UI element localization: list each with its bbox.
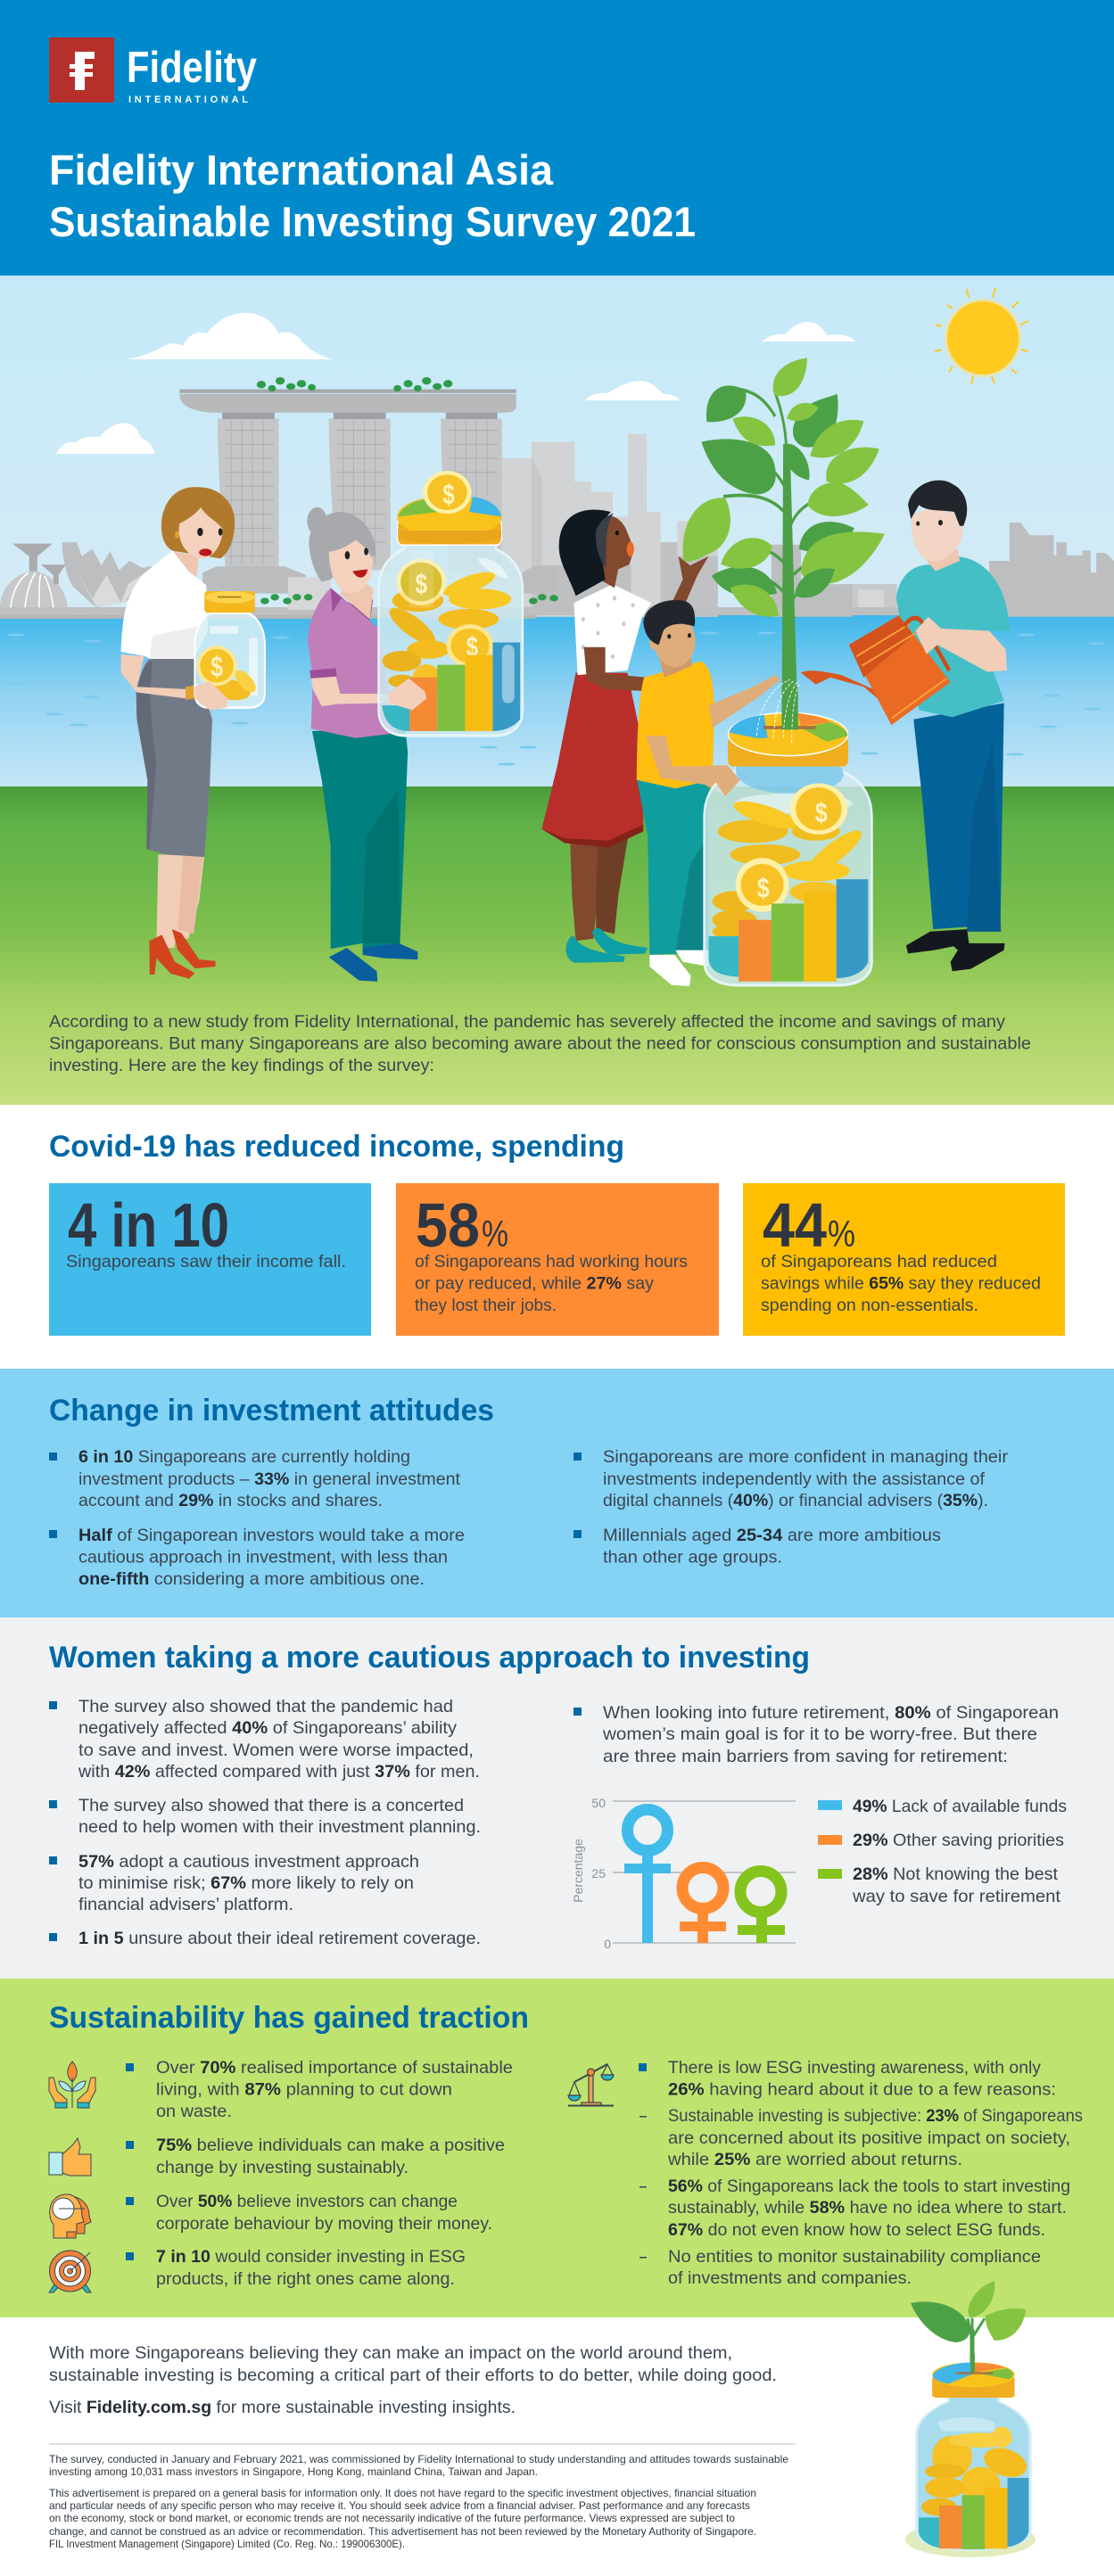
disclaimer: investing among 10,031 mass investors in Singapore, Hong Kong, mainland China, Taiwan and Japan. bbox=[49, 2465, 538, 2478]
left bullets: need to help women with their investment planning. bbox=[78, 1817, 481, 1837]
symbol: 49% blue bbox=[624, 1810, 671, 1943]
mother bbox=[541, 510, 709, 963]
chart legend: 28% Not knowing the best bbox=[853, 1864, 1059, 1884]
right bullets: than other age groups. bbox=[603, 1548, 782, 1568]
chart legend: 49% Lack of available funds bbox=[853, 1797, 1067, 1816]
Marina Bay Sands bbox=[179, 377, 558, 610]
older woman with large jar bbox=[307, 507, 426, 982]
right bullets bbox=[639, 2058, 1083, 2288]
stat card: 58%: or pay reduced, while 27% say bbox=[415, 1273, 654, 1293]
left bullets: to save and invest. Women were worse impacted, bbox=[78, 1741, 474, 1760]
stat card: 58%: % bbox=[482, 1213, 508, 1255]
chart legend: way to save for retirement bbox=[852, 1887, 1061, 1906]
title bbox=[49, 146, 696, 245]
logo: Fidelity International: Fidelity bbox=[127, 44, 257, 92]
stat card: 44% bbox=[743, 1183, 1065, 1336]
section: closing bbox=[49, 2281, 1036, 2557]
left bullets: Half of Singaporean investors would take a more bbox=[78, 1526, 465, 1545]
right bullets: digital channels (40%) or financial advisers (35%). bbox=[603, 1491, 988, 1510]
hero illustration panel bbox=[0, 276, 1114, 1105]
right bullets: of investments and companies. bbox=[668, 2268, 912, 2288]
right bullets: Singaporeans are more confident in managing their bbox=[603, 1447, 1009, 1467]
large coin jar: $ bbox=[416, 568, 427, 599]
stat card: 44%: of Singaporeans had reduced bbox=[761, 1252, 997, 1272]
chart: barriers, female symbols bbox=[571, 1796, 796, 1951]
left bullets: corporate behaviour by moving their money. bbox=[156, 2214, 492, 2234]
right bullets: 56% of Singaporeans lack the tools to start investing bbox=[668, 2177, 1070, 2196]
heading: Covid-19 has reduced income, spending bbox=[49, 1130, 624, 1164]
stat card: 58%: they lost their jobs. bbox=[415, 1296, 557, 1315]
boy bbox=[637, 600, 780, 986]
disclaimer: The survey, conducted in January and February 2021, was commissioned by Fidelity International to study understanding and attitudes towards sustainable bbox=[49, 2453, 788, 2465]
chart: barriers, female symbols: 25 bbox=[591, 1866, 606, 1881]
city skyline bbox=[0, 434, 1114, 619]
left bullets bbox=[126, 2058, 513, 2289]
title: Sustainable Investing Survey 2021 bbox=[49, 198, 696, 245]
intro text: investing. Here are the key findings of the survey: bbox=[49, 1056, 434, 1075]
chart: barriers, female symbols: 50 bbox=[591, 1796, 606, 1810]
left bullets: 6 in 10 Singaporeans are currently holding bbox=[78, 1447, 410, 1467]
left bullets: on waste. bbox=[156, 2102, 232, 2121]
right bullets: while 25% are worried about returns. bbox=[667, 2150, 962, 2169]
left bullets: change by investing sustainably. bbox=[156, 2158, 408, 2177]
left bullets: investment products – 33% in general investment bbox=[78, 1469, 461, 1489]
right bullets: investments independently with the assistance of bbox=[603, 1469, 986, 1489]
stat card: 4 in 10 bbox=[49, 1183, 371, 1336]
title: Fidelity International Asia bbox=[49, 146, 554, 193]
water ripples bbox=[5, 631, 1106, 765]
right bullet: When looking into future retirement, 80% of Singaporean bbox=[603, 1703, 1059, 1723]
coin jar with tree: $ bbox=[815, 796, 828, 828]
chart legend: 29% Other saving priorities bbox=[853, 1831, 1064, 1850]
header band bbox=[0, 0, 1114, 276]
heading: Women taking a more cautious approach to investing bbox=[49, 1641, 810, 1675]
icon: target with arrow bbox=[49, 2251, 91, 2292]
closing text: Visit Fidelity.com.sg for more sustainable investing insights. bbox=[49, 2398, 516, 2417]
small coin jar: $ bbox=[210, 652, 223, 684]
left bullets: financial advisers’ platform. bbox=[78, 1895, 293, 1914]
stat card: 44%: % bbox=[828, 1213, 855, 1255]
right bullets: Millennials aged 25-34 are more ambitious bbox=[603, 1526, 941, 1545]
stat card: 44%: 44 bbox=[763, 1190, 827, 1260]
left bullets: 75% believe individuals can make a positive bbox=[156, 2136, 505, 2155]
disclaimer: FIL Investment Management (Singapore) Limited (Co. Reg. No.: 199006300E). bbox=[49, 2538, 405, 2550]
chart: barriers, female symbols: 0 bbox=[604, 1937, 611, 1951]
sapling tree bbox=[683, 358, 885, 728]
stat card: 4 in 10: 4 in 10 bbox=[68, 1190, 229, 1260]
stat card: 44%: savings while 65% say they reduced bbox=[761, 1273, 1041, 1293]
heading: Sustainability has gained traction bbox=[49, 2001, 529, 2035]
left bullets: 57% adopt a cautious investment approach bbox=[78, 1852, 419, 1872]
left bullets: Over 70% realised importance of sustainable bbox=[156, 2058, 513, 2078]
sun bbox=[935, 288, 1028, 384]
left bullets: living, with 87% planning to cut down bbox=[156, 2079, 452, 2099]
section: Women bbox=[0, 1617, 1114, 1979]
section: Covid-19 bbox=[0, 1105, 1114, 1369]
left bullets: cautious approach in investment, with less than bbox=[78, 1548, 448, 1568]
right bullets: 67% do not even know how to select ESG funds. bbox=[668, 2220, 1045, 2240]
symbol: 28% green bbox=[738, 1871, 785, 1943]
right bullets: No entities to monitor sustainability compliance bbox=[668, 2247, 1041, 2267]
large coin jar: $ bbox=[442, 479, 455, 510]
large coin jar bbox=[379, 471, 523, 736]
right bullet: women’s main goal is for it to be worry-free. But there bbox=[602, 1724, 1037, 1744]
section: Sustainability bbox=[0, 1979, 1114, 2317]
icon: hands with plant bbox=[49, 2062, 95, 2108]
disclaimer bbox=[49, 2453, 788, 2550]
right bullets: 26% having heard about it due to a few reasons: bbox=[668, 2079, 1056, 2099]
left bullets bbox=[49, 1447, 465, 1589]
chart legend bbox=[818, 1797, 1067, 1906]
icon: thumbs up bbox=[49, 2138, 91, 2176]
stat card: 44%: spending on non-essentials. bbox=[761, 1296, 978, 1315]
stat card: 58%: of Singaporeans had working hours bbox=[415, 1252, 688, 1272]
right bullets: Sustainable investing is subjective: 23% of Singaporeans bbox=[668, 2106, 1083, 2126]
stat card: 4 in 10: Singaporeans saw their income fall. bbox=[66, 1252, 346, 1272]
clouds bbox=[56, 313, 855, 454]
chart: barriers, female symbols: Percentage bbox=[571, 1839, 585, 1903]
intro text bbox=[49, 1012, 1031, 1075]
left bullets: products, if the right ones came along. bbox=[156, 2269, 455, 2289]
section: Change in investment attitudes bbox=[0, 1369, 1114, 1617]
right bullets bbox=[574, 1447, 1009, 1568]
left bullets: with 42% affected compared with just 37% for men. bbox=[78, 1762, 480, 1782]
stat card: 58% bbox=[396, 1183, 719, 1336]
left bullets: The survey also showed that there is a concerted bbox=[78, 1796, 464, 1815]
left bullets: negatively affected 40% of Singaporeans’ ability bbox=[78, 1718, 457, 1738]
closing text: sustainable investing is becoming a critical part of their efforts to do better, while doing good. bbox=[49, 2366, 777, 2385]
symbol: 29% orange bbox=[680, 1867, 726, 1943]
right bullets: There is low ESG investing awareness, with only bbox=[668, 2058, 1041, 2078]
logo: Fidelity International: INTERNATIONAL bbox=[128, 95, 248, 105]
right bullet: are three main barriers from saving for retirement: bbox=[603, 1747, 1008, 1766]
large coin jar: $ bbox=[466, 631, 478, 663]
left bullets: to minimise risk; 67% more likely to rely on bbox=[78, 1873, 414, 1893]
woman with small jar bbox=[121, 487, 235, 979]
icon: head with target bbox=[50, 2194, 91, 2238]
stat card: 58%: 58 bbox=[416, 1190, 480, 1260]
coin jar with tree bbox=[705, 679, 871, 985]
right bullets: are concerned about its positive impact on society, bbox=[668, 2128, 1070, 2148]
closing text bbox=[49, 2343, 777, 2417]
closing text: With more Singaporeans believing they can make an impact on the world around them, bbox=[49, 2343, 732, 2363]
disclaimer: and particular needs of any specific person who may receive it. You should seek advice from a financial adviser. Past performance and any forecasts bbox=[49, 2499, 750, 2512]
footer jar with sapling bbox=[905, 2281, 1036, 2557]
right bullet bbox=[574, 1703, 1059, 1766]
left bullets: 7 in 10 would consider investing in ESG bbox=[156, 2247, 466, 2267]
logo: Fidelity International bbox=[49, 37, 257, 105]
icon: balance scales bbox=[568, 2064, 614, 2106]
heading: Change in investment attitudes bbox=[49, 1394, 494, 1428]
left bullets: The survey also showed that the pandemic had bbox=[78, 1697, 453, 1716]
Gardens by the Bay and ArtScience Museum bbox=[0, 542, 156, 607]
left bullets: one-fifth considering a more ambitious one. bbox=[78, 1569, 425, 1589]
left bullets bbox=[49, 1697, 481, 1948]
disclaimer: This advertisement is prepared on a general basis for information only. It does not have regard to the specific investment objectives, financial situation bbox=[49, 2487, 756, 2499]
left bullets: Over 50% believe investors can change bbox=[156, 2192, 458, 2211]
right bullets: sustainably, while 58% have no idea where to start. bbox=[668, 2198, 1067, 2218]
disclaimer: change, and cannot be construed as an advice or recommendation. This advertisement has not been reviewed by the Monetary Authority of Singapore. bbox=[49, 2525, 756, 2538]
intro text: According to a new study from Fidelity International, the pandemic has severely affected the income and savings of many bbox=[49, 1012, 1005, 1032]
disclaimer: on the economy, stock or bond market, or economic trends are not necessarily indicative of the future performance. Views expressed are subject to bbox=[49, 2512, 735, 2524]
left bullets: 1 in 5 unsure about their ideal retirement coverage. bbox=[78, 1929, 481, 1948]
father with watering can bbox=[801, 481, 1010, 971]
small coin jar bbox=[194, 591, 265, 710]
intro text: Singaporeans. But many Singaporeans are also becoming aware about the need for conscious consumption and sustainable bbox=[49, 1034, 1031, 1054]
left bullets: account and 29% in stocks and shares. bbox=[78, 1491, 383, 1510]
coin jar with tree: $ bbox=[757, 872, 770, 903]
